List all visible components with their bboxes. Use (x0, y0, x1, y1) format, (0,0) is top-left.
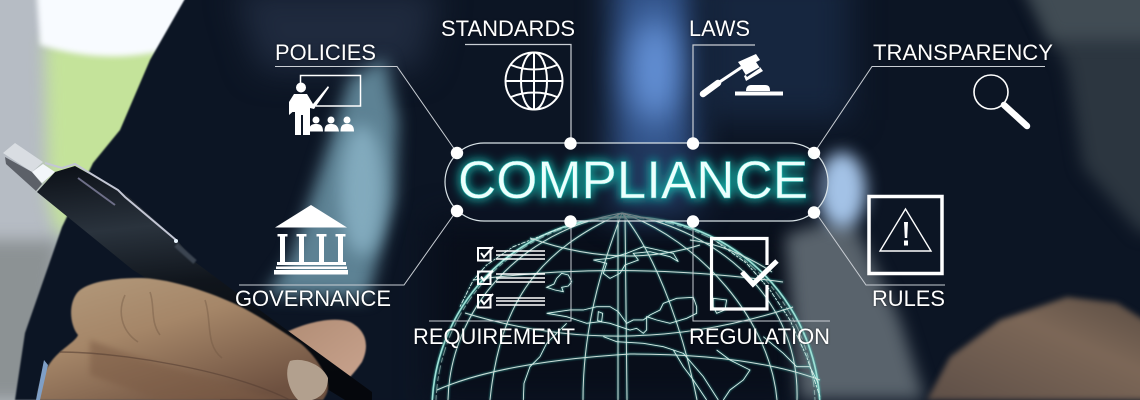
world globe wireframe (432, 213, 820, 400)
heading: POLICIES: POLICIES (275, 40, 376, 65)
title: COMPLIANCE: COMPLIANCE (458, 151, 808, 210)
icon: warning sign (869, 196, 942, 274)
map outlines: continents (460, 227, 820, 400)
heading: LAWS: LAWS (689, 16, 750, 41)
icon: temple (274, 205, 348, 274)
icon: checklist (478, 247, 545, 308)
title: COMPLIANCE: COMPLIANCE (458, 151, 808, 210)
icon: gavel (703, 54, 783, 96)
icon: globe (506, 52, 562, 110)
central capsule with nodes (445, 137, 828, 228)
photo: thumb behind pen (280, 320, 366, 384)
heading: REGULATION: REGULATION (689, 324, 830, 349)
icon: magnifying glass (974, 75, 1027, 126)
photo: pen (3, 143, 372, 400)
heading: REQUIREMENT: REQUIREMENT (413, 324, 575, 349)
photo: hand holding pen (36, 278, 328, 400)
node dots (451, 137, 820, 228)
heading: STANDARDS: STANDARDS (441, 16, 575, 41)
heading: RULES: RULES (872, 286, 945, 311)
heading: GOVERNANCE: GOVERNANCE (235, 286, 391, 311)
icon: checkbox (712, 238, 777, 309)
icon: presenter at board (289, 76, 360, 135)
connector lines (239, 44, 1045, 321)
heading: TRANSPARENCY: TRANSPARENCY (873, 40, 1053, 65)
